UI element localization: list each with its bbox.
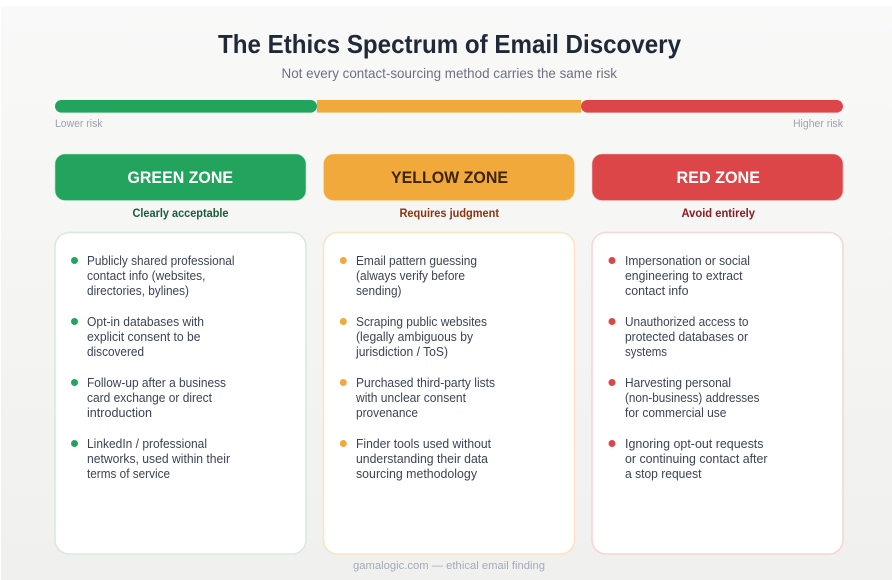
subtitle: Not every contact-sourcing method carries the same risk <box>282 65 618 81</box>
red item 1: engineering to extract <box>625 269 743 283</box>
red zone header: RED ZONE <box>676 168 760 187</box>
red item 3 <box>608 376 760 420</box>
red item 4: Ignoring opt-out requests <box>625 437 764 451</box>
green item 1: directories, bylines) <box>87 284 189 298</box>
yellow item 1 <box>340 254 477 298</box>
red item 4: or continuing contact after <box>625 452 768 466</box>
red zone card <box>592 232 843 554</box>
red item 1 <box>608 254 750 298</box>
yellow item 3: Purchased third-party lists <box>356 376 495 390</box>
green item 3: card exchange or direct <box>87 391 212 405</box>
red item 2: systems <box>625 345 667 359</box>
yellow item 2: jurisdiction / ToS) <box>355 345 448 359</box>
red item 1: contact info <box>625 284 689 298</box>
yellow zone tagline: Requires judgment <box>400 206 499 220</box>
green zone card <box>55 232 306 554</box>
green item 4: LinkedIn / professional <box>87 437 207 451</box>
yellow item 2: (legally ambiguous by <box>356 330 474 344</box>
yellow item 4: Finder tools used without <box>356 437 492 451</box>
green item 2: explicit consent to be <box>87 330 201 344</box>
yellow item 2: Scraping public websites <box>356 315 487 329</box>
red item 2: protected databases or <box>625 330 748 344</box>
yellow item 4 <box>340 437 492 481</box>
yellow item 4: sourcing methodology <box>356 467 478 481</box>
green item 2: Opt-in databases with <box>87 315 204 329</box>
footer: gamalogic.com — ethical email finding <box>353 560 545 572</box>
green item 4: terms of service <box>87 467 170 481</box>
green item 4: networks, used within their <box>87 452 230 466</box>
yellow item 3 <box>340 376 495 420</box>
panel: red zone <box>592 154 843 554</box>
panel: green zone <box>55 154 306 554</box>
yellow zone header <box>324 154 574 200</box>
red item 1: Impersonation or social <box>625 254 750 268</box>
risk spectrum bar <box>55 100 843 113</box>
title: The Ethics Spectrum of Email Discovery <box>218 29 681 59</box>
red zone tagline: Avoid entirely <box>682 206 755 220</box>
label: higher risk: Higher risk <box>793 118 843 130</box>
yellow item 1: Email pattern guessing <box>356 254 477 268</box>
green item 4 <box>71 437 230 481</box>
green item 1 <box>71 254 234 298</box>
yellow item 3: with unclear consent <box>355 391 467 405</box>
yellow item 4: understanding their data <box>356 452 488 466</box>
green item 1: contact info (websites, <box>87 269 206 283</box>
red zone header <box>592 154 843 200</box>
green zone header <box>55 154 306 200</box>
green item 1: Publicly shared professional <box>87 254 234 268</box>
green zone tagline: Clearly acceptable <box>132 206 229 220</box>
yellow item 1: sending) <box>356 284 402 298</box>
green item 3: Follow-up after a business <box>87 376 226 390</box>
label: lower risk: Lower risk <box>55 118 103 130</box>
green zone header: GREEN ZONE <box>128 168 233 187</box>
red item 2 <box>608 315 749 359</box>
green item 2: discovered <box>87 345 144 359</box>
yellow item 2 <box>340 315 487 359</box>
red item 3: Harvesting personal <box>625 376 731 390</box>
red item 3: (non-business) addresses <box>625 391 760 405</box>
panel: yellow zone <box>324 154 574 554</box>
green item 3 <box>71 376 226 420</box>
yellow item 1: (always verify before <box>356 269 465 283</box>
red item 2: Unauthorized access to <box>625 315 749 329</box>
yellow zone header: YELLOW ZONE <box>391 168 508 187</box>
yellow zone card <box>324 232 574 554</box>
green item 3: introduction <box>87 406 152 420</box>
red item 3: for commercial use <box>625 406 727 420</box>
red item 4 <box>608 437 768 481</box>
red item 4: a stop request <box>625 467 702 481</box>
yellow item 3: provenance <box>356 406 418 420</box>
green item 2 <box>71 315 204 359</box>
